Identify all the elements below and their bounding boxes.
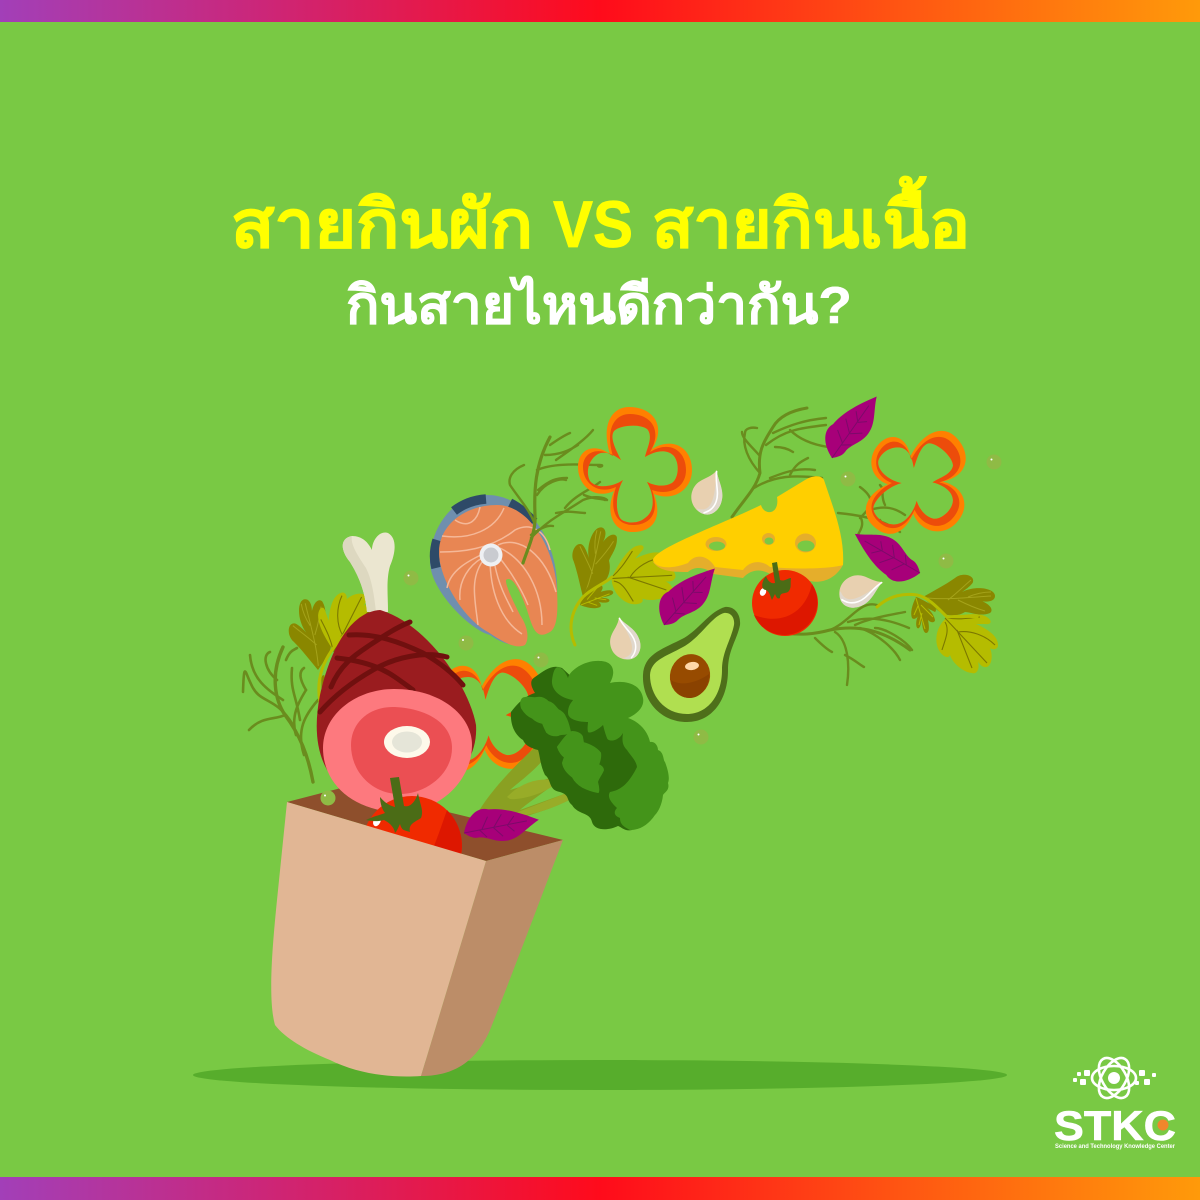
title: line 1: VS	[553, 187, 633, 261]
bottom gradient bar	[0, 1177, 1200, 1200]
ham pink cut	[323, 689, 472, 812]
parsley: centre	[562, 522, 687, 645]
bell pepper ring: behind ham	[399, 628, 578, 807]
bone	[343, 532, 395, 612]
top gradient bar	[0, 0, 1200, 22]
ground shadow	[193, 1060, 1007, 1090]
logo pixel dots	[1073, 1070, 1156, 1085]
paper bag front	[271, 802, 486, 1077]
title: line 1	[231, 175, 970, 261]
parsley: behind ham	[284, 583, 389, 702]
parsley: right	[877, 575, 998, 673]
dill sprig: behind right pepper	[838, 485, 905, 535]
ham bone cut	[384, 726, 430, 758]
salmon flesh lines	[440, 507, 556, 634]
ham inner meat	[351, 707, 452, 794]
title: line 1: สายกินเนื้อ	[652, 175, 970, 261]
purple basil leaf: centre	[649, 555, 726, 635]
salmon backbone	[480, 544, 502, 566]
bell pepper ring: right	[835, 402, 999, 566]
dill sprig: above cheese	[732, 408, 828, 517]
paper bag side	[421, 840, 563, 1076]
dill sprig: over salmon	[510, 430, 607, 563]
garlic clove: top	[686, 465, 731, 518]
dill sprig: bottom right	[780, 604, 912, 685]
dill sprig: left of ham	[243, 647, 318, 782]
ham lattice	[320, 622, 463, 712]
bag interior	[287, 787, 563, 861]
broccoli centre floret	[558, 732, 603, 792]
logo atom icon	[1092, 1053, 1136, 1103]
logo orange dot	[1158, 1120, 1168, 1130]
title: line 2: กินสายไหนดีกว่ากัน?	[346, 275, 852, 335]
logo tagline: Science and Technology Knowledge Center	[1055, 1144, 1176, 1150]
ham	[317, 610, 476, 812]
title: line 1: สายกินผัก	[231, 187, 533, 261]
purple basil leaf: right	[844, 521, 928, 591]
garlic clove: right	[834, 567, 888, 612]
broccoli stems	[470, 747, 569, 831]
salmon steak	[430, 495, 557, 646]
floating bubbles	[320, 454, 1002, 806]
cheese holes	[706, 533, 816, 552]
garlic clove: centre	[604, 614, 643, 663]
avocado	[643, 607, 740, 722]
STKC logo	[1054, 1053, 1176, 1150]
tomato in bag	[362, 777, 462, 896]
broccoli	[511, 661, 669, 830]
broccoli light crown	[552, 661, 669, 830]
purple basil leaf: over bag	[460, 800, 541, 848]
tomato: right	[752, 562, 818, 636]
avocado seed	[665, 650, 715, 702]
bell pepper ring: top centre	[578, 407, 692, 532]
broccoli left floret	[521, 698, 570, 735]
broccoli dark body	[511, 667, 660, 830]
purple basil leaf: top	[815, 384, 889, 467]
logo wordmark: STKC	[1054, 1102, 1176, 1149]
cheese wedge	[653, 476, 843, 582]
